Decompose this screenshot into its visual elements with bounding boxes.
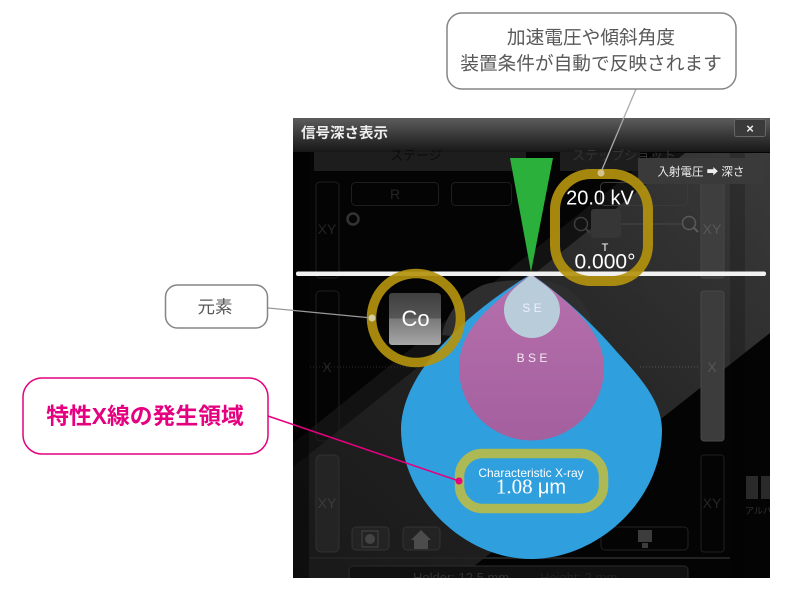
callout: element xyxy=(166,285,268,328)
close button xyxy=(734,120,766,136)
icon: stage marker xyxy=(638,530,652,548)
chart: BSE volume xyxy=(459,274,604,440)
faded background tabs: ステップショット xyxy=(572,148,676,163)
X-ray depth readout xyxy=(479,468,584,498)
faded background labels: XY xyxy=(703,221,722,237)
faded background labels: X xyxy=(322,359,332,375)
sample surface line xyxy=(296,272,766,276)
X-ray depth readout: 1.08 μm xyxy=(496,474,566,498)
icon: home xyxy=(411,530,431,549)
icon: target xyxy=(362,531,378,547)
close button: × xyxy=(746,121,754,136)
incident voltage button xyxy=(638,158,745,184)
faded background tabs: ステージ xyxy=(390,148,442,163)
callout: X-ray generation region xyxy=(23,378,268,454)
voltage and tilt readout: 20.0 kV xyxy=(566,188,635,210)
callout: device conditions xyxy=(447,13,736,89)
element button: Co xyxy=(401,306,430,331)
faded background labels: X xyxy=(707,359,717,375)
highlight ring: voltage and tilt xyxy=(555,174,648,281)
incident voltage button: 入射電圧 ➡ 深さ xyxy=(658,164,744,178)
faded background labels xyxy=(318,186,722,585)
icon: joystick pad xyxy=(591,209,615,238)
voltage and tilt readout: 0.000° xyxy=(575,250,635,274)
chart: SE volume xyxy=(504,274,560,338)
faded background labels: Holder: 12.5 mm xyxy=(413,570,509,585)
panel: signal depth window xyxy=(293,118,781,586)
voltage and tilt readout: T xyxy=(602,242,609,254)
highlight ring: X-ray depth xyxy=(460,454,604,508)
callout: device conditions: 装置条件が自動で反映されます xyxy=(460,53,722,74)
leader line: settings xyxy=(598,89,636,176)
callout: device conditions: 加速電圧や傾斜角度 xyxy=(507,27,675,48)
faded background labels: XY xyxy=(318,495,337,511)
faded background labels: R xyxy=(390,186,400,202)
leader line: X-ray region xyxy=(268,416,462,484)
icon: album: アルバム xyxy=(745,506,781,516)
faded background tabs xyxy=(314,148,676,171)
element button xyxy=(389,293,441,345)
chart: characteristic X-ray volume xyxy=(401,274,662,559)
gray halo behind the interaction volume xyxy=(442,280,521,336)
X-ray depth readout: Characteristic X-ray xyxy=(478,466,584,480)
icon: album xyxy=(746,476,770,514)
highlight ring: element xyxy=(372,274,460,362)
faded background labels: XY xyxy=(318,221,337,237)
callout: X-ray generation region: 特性X線の発生領域 xyxy=(46,403,244,429)
voltage and tilt readout xyxy=(567,190,634,268)
faded background labels: XY xyxy=(703,495,722,511)
label: SE: S E xyxy=(522,301,542,315)
callout: element: 元素 xyxy=(198,297,232,317)
window title: 信号深さ表示 xyxy=(301,124,388,142)
electron beam xyxy=(510,158,553,272)
faded background labels: Height: 2 mm xyxy=(540,570,617,585)
faded background controls xyxy=(310,182,730,586)
label: BSE: B S E xyxy=(517,351,547,365)
leader line: element xyxy=(268,308,376,322)
